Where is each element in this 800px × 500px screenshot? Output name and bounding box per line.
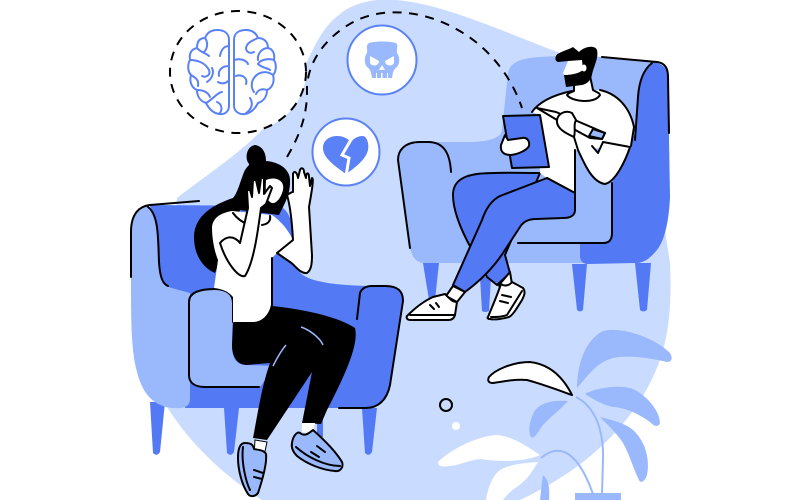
plant stems: [541, 397, 603, 494]
icon: broken heart badge: [312, 118, 380, 186]
chair back side: [580, 62, 670, 264]
chair legs: [423, 263, 651, 312]
chair legs: [150, 402, 377, 455]
background blob: [160, 0, 671, 500]
man: [407, 47, 634, 320]
plant leaves: [529, 330, 672, 500]
icon: skull badge: [348, 26, 416, 94]
plant pot: [575, 493, 621, 500]
thought bubble: brain: [170, 11, 306, 133]
white leaves: [438, 435, 540, 500]
woman left arm and hand: [220, 178, 272, 276]
woman shirt outlines: [233, 213, 272, 323]
chair body: [398, 56, 657, 263]
man back shoe: [488, 272, 525, 319]
man hand on clipboard: [501, 135, 529, 155]
woman trousers: [232, 306, 356, 440]
man hand on pen: [557, 112, 576, 137]
man front leg: [453, 178, 575, 292]
clipboard: [503, 115, 549, 168]
icon: brain: [188, 30, 276, 114]
chair front arm: [189, 289, 275, 387]
small dot: [452, 422, 460, 430]
chair dark body: [150, 205, 403, 408]
woman left shoe: [238, 440, 267, 496]
man front shoe: [407, 286, 465, 320]
woman shirt: [212, 211, 293, 323]
chair outlines: [398, 57, 669, 248]
chair outlines: [131, 201, 403, 408]
man torso and shirt: [532, 90, 634, 193]
man arm: [574, 137, 630, 184]
woman right shoe: [292, 423, 343, 471]
outlined white leaf: [488, 362, 572, 395]
woman face: [266, 178, 283, 203]
man neck and head: [555, 47, 600, 101]
plant: [438, 330, 672, 500]
woman right arm: [277, 168, 313, 273]
chair side panel: [131, 206, 190, 408]
left armchair: [131, 201, 403, 455]
man back leg: [453, 173, 540, 285]
pen: [537, 108, 605, 139]
woman hair back: [194, 145, 290, 273]
dashed thought line: [287, 12, 522, 157]
right armchair: [398, 56, 670, 312]
woman: [194, 145, 356, 496]
small circle: [440, 399, 452, 411]
